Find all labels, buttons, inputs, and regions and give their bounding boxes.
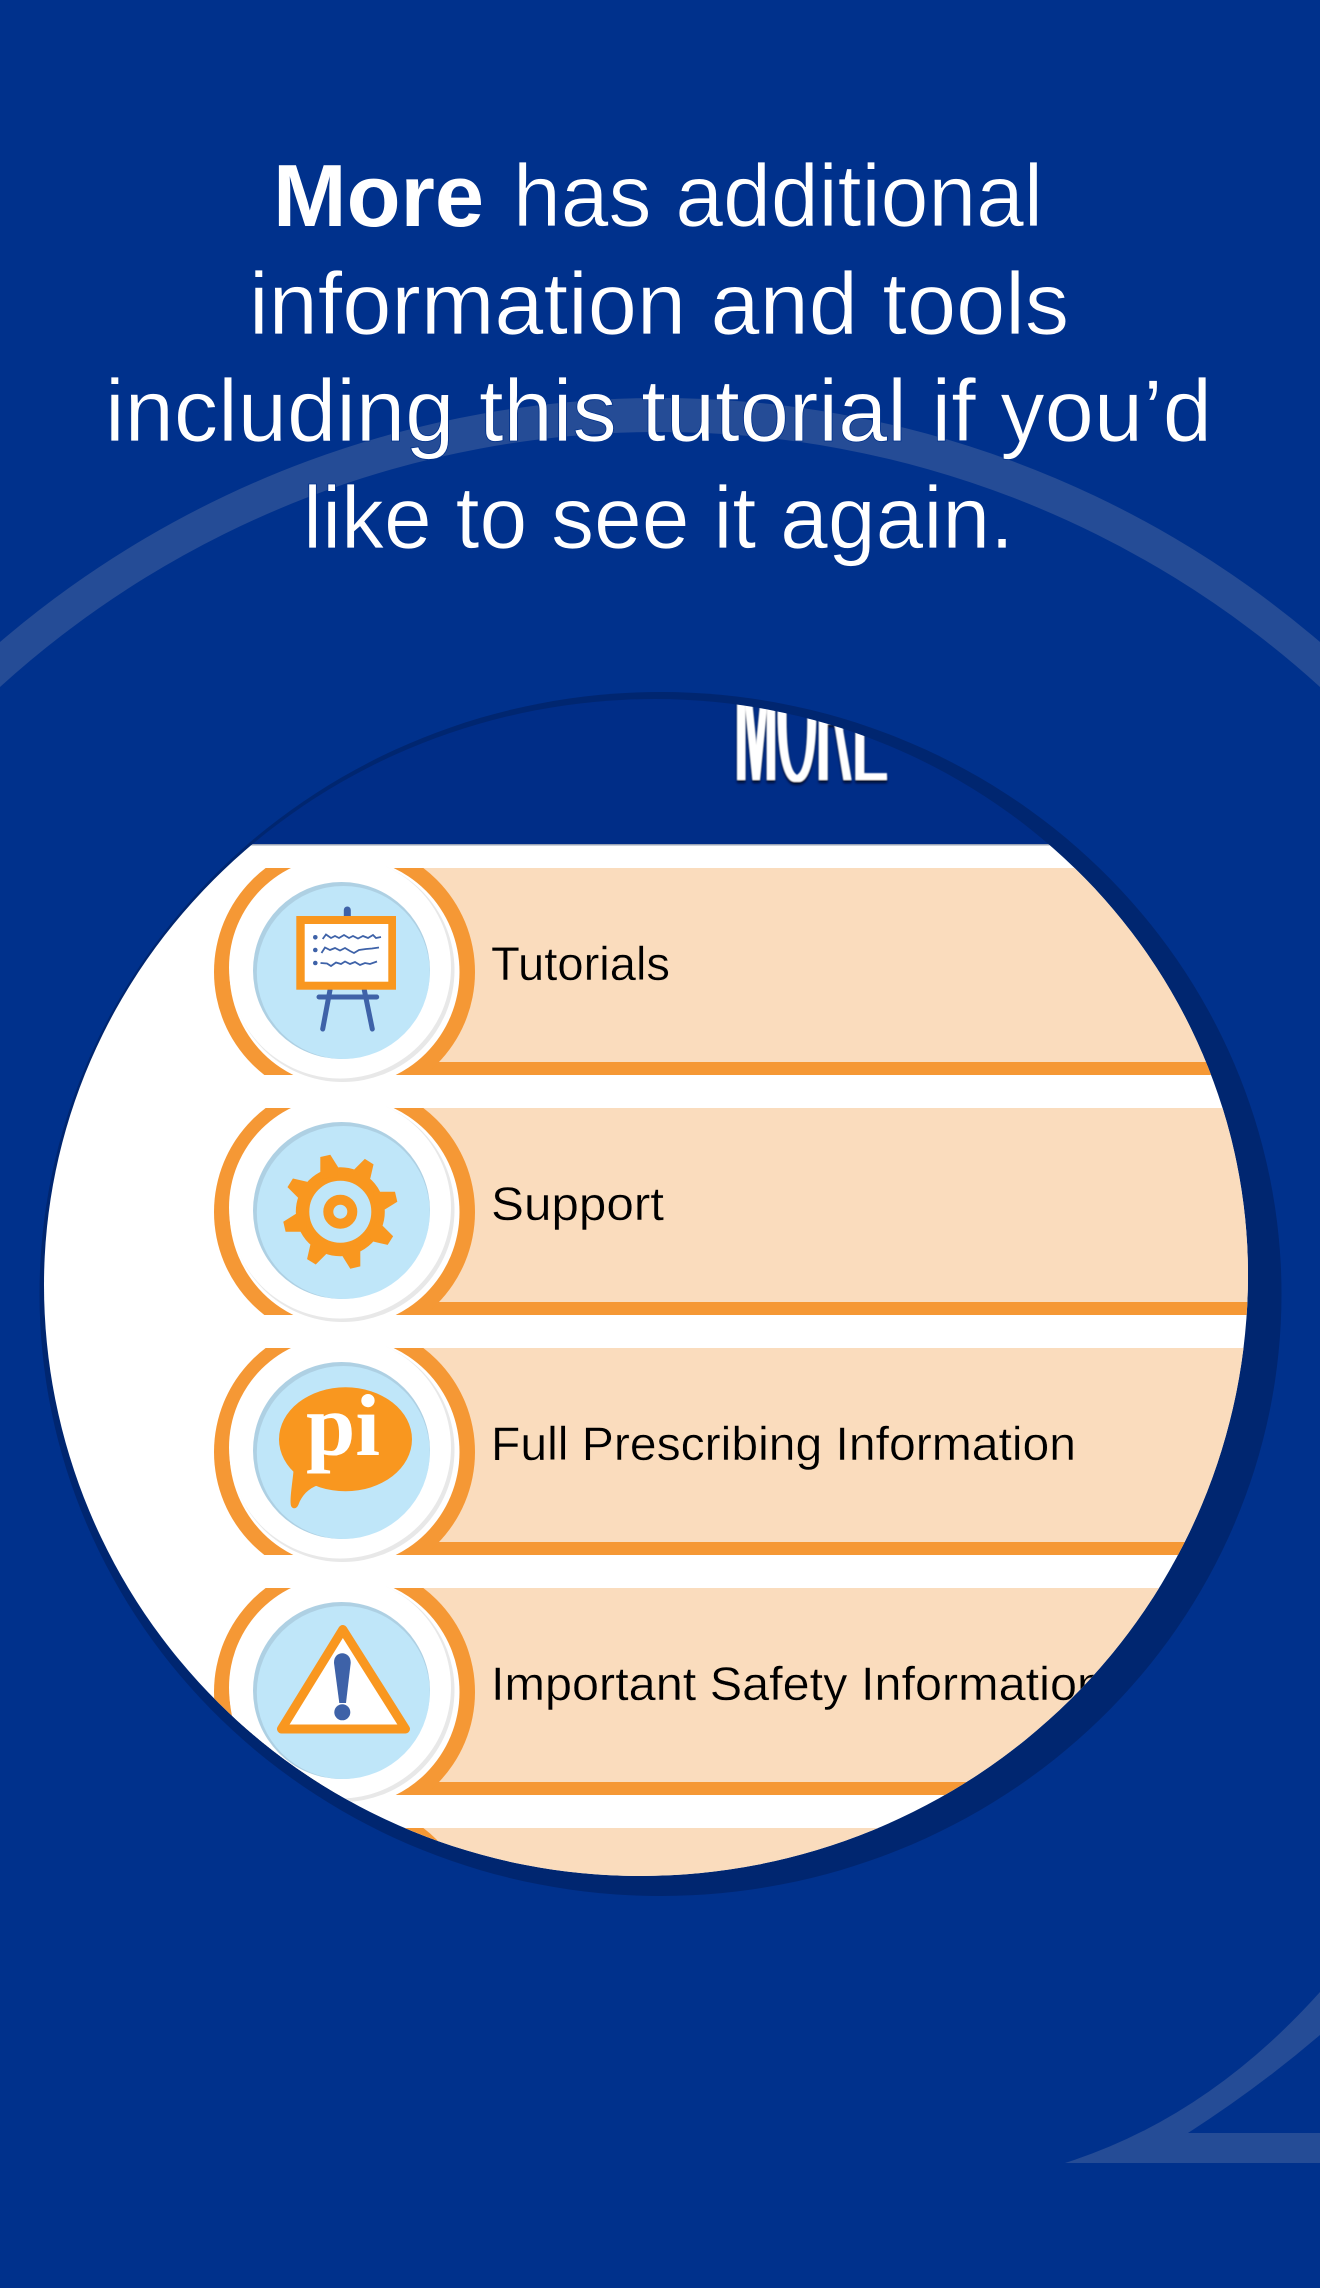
row: Full Prescribing Information <box>214 1348 1244 1562</box>
title: including this tutorial if you’d <box>105 361 1212 460</box>
icon: pi speech bubble: pi <box>306 1378 380 1475</box>
label: Important Safety Information: Important Safety Information <box>491 1657 1104 1710</box>
lens outer ring <box>40 692 1282 1896</box>
icon: warning triangle <box>282 1630 406 1729</box>
title <box>105 146 1212 567</box>
row: Support <box>214 1108 1248 1322</box>
row: Tutorials <box>214 868 1211 1082</box>
title: More <box>273 146 484 245</box>
label: Full Prescribing Information: Full Prescribing Information <box>491 1417 1076 1470</box>
title: has additional <box>513 146 1043 245</box>
title: like to see it again. <box>303 468 1014 567</box>
icon: pi speech bubble <box>279 1378 412 1508</box>
label: Tutorials: Tutorials <box>491 937 670 990</box>
row: clipped fifth item <box>405 1828 878 1876</box>
title: information and tools <box>249 254 1069 353</box>
background arc: top <box>0 398 1320 687</box>
background arc: lower right <box>1065 1992 1320 2163</box>
panel: app screen inside lens <box>44 699 1248 1876</box>
distorted MORE heading: MORE <box>735 609 887 826</box>
screen body <box>44 845 1248 1876</box>
icon: gear <box>283 1155 397 1269</box>
screen header <box>253 699 1048 844</box>
row: Important Safety Information <box>214 1588 1159 1802</box>
label: Support: Support <box>491 1177 664 1230</box>
icon: easel <box>296 910 396 1029</box>
